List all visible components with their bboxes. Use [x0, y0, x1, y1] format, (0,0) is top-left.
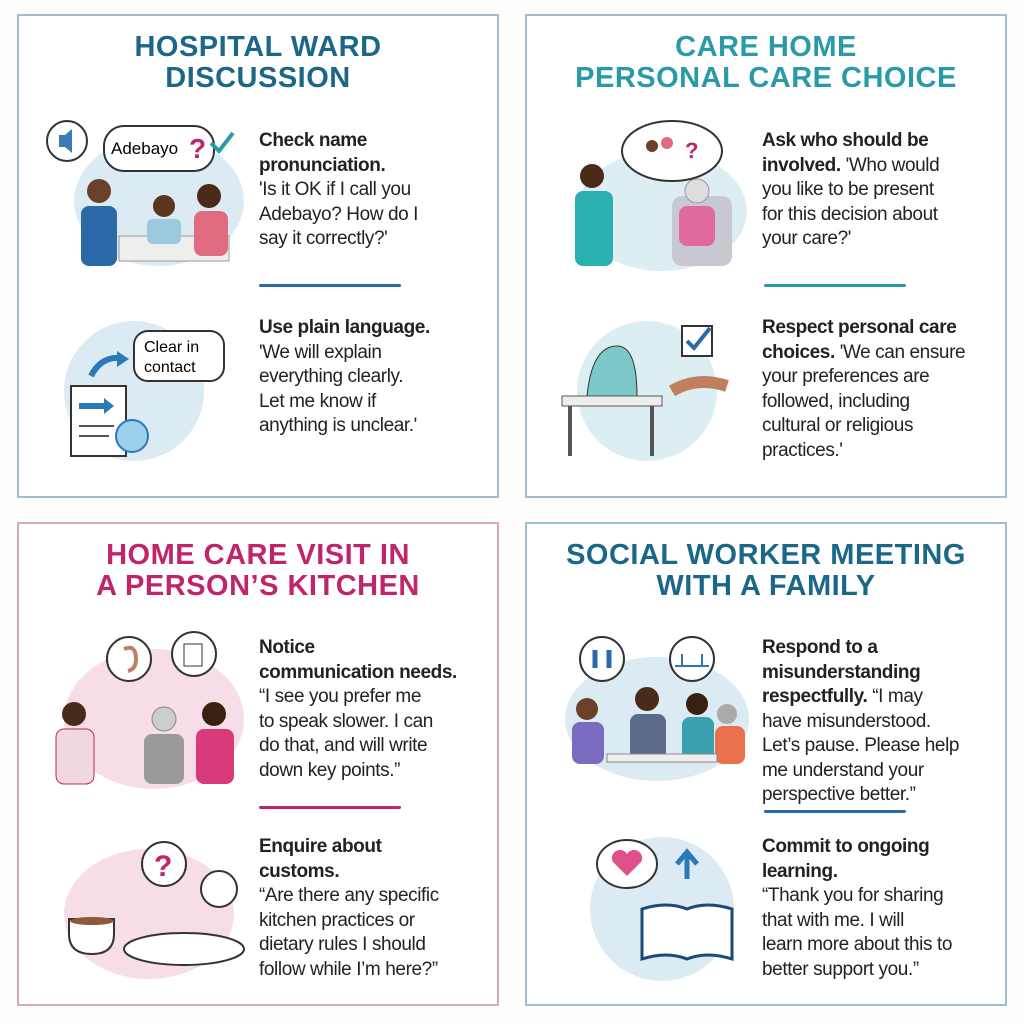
- title: hospital ward: HOSPITAL WARD: [134, 31, 382, 63]
- illustration: plain language: contact: [144, 359, 196, 376]
- text: misunderstanding: me understand your: [762, 760, 924, 780]
- illustration: tea and plate: ?: [154, 850, 172, 883]
- title: care home: CARE HOME: [675, 31, 857, 63]
- text: communication needs: down key points.”: [259, 760, 400, 780]
- text: who involved: Ask who should be: [762, 130, 928, 151]
- text: communication needs: communication needs.: [259, 662, 457, 682]
- title: home care: [96, 539, 420, 602]
- text: plain language: 'We will explain: [259, 342, 382, 362]
- text: plain language: [259, 317, 430, 436]
- illustration: nurse with patient: Adebayo: [111, 139, 178, 158]
- title: home care: A PERSON’S KITCHEN: [96, 570, 420, 602]
- text: pronunciation: say it correctly?': [259, 228, 387, 249]
- illustration: hijab and hand: [562, 321, 729, 461]
- text: misunderstanding: Respond to a: [762, 637, 878, 658]
- text: plain language: anything is unclear.': [259, 415, 417, 436]
- text: communication needs: do that, and will write: [259, 735, 427, 756]
- text: customs: customs.: [259, 860, 339, 882]
- text: personal care choices: followed, including: [762, 390, 910, 412]
- text: pronunciation: Adebayo? How do I: [259, 204, 418, 224]
- text: pronunciation: [259, 130, 418, 249]
- text: ongoing learning: Commit to ongoing: [762, 836, 929, 857]
- panel: hospital ward: [17, 14, 499, 498]
- text: ongoing learning: better support you.”: [762, 958, 919, 980]
- panel: care home: [525, 14, 1007, 498]
- text: plain language: Use plain language.: [259, 317, 430, 338]
- text: misunderstanding: respectfully. “I may: [762, 686, 923, 707]
- text: communication needs: [259, 637, 457, 780]
- text: who involved: for this decision about: [762, 204, 938, 224]
- text: personal care choices: cultural or religious: [762, 415, 913, 436]
- text: customs: dietary rules I should: [259, 934, 426, 955]
- text: personal care choices: choices. 'We can ensure: [762, 342, 965, 362]
- text: plain language: everything clearly.: [259, 366, 403, 387]
- text: ongoing learning: that with me. I will: [762, 910, 904, 930]
- illustration: kitchen visit: [56, 631, 244, 789]
- title: social worker: SOCIAL WORKER MEETING: [566, 539, 966, 571]
- text: personal care choices: [762, 317, 965, 460]
- text: misunderstanding: have misunderstood.: [762, 710, 931, 732]
- illustration: carer and resident: [575, 120, 747, 271]
- title: hospital ward: [134, 31, 382, 94]
- text: misunderstanding: Let’s pause. Please help: [762, 735, 959, 756]
- illustration: tea and plate: [64, 841, 245, 979]
- text: pronunciation: Check name: [259, 130, 367, 151]
- title: care home: [575, 31, 957, 94]
- text: pronunciation: pronunciation.: [259, 154, 385, 176]
- illustration: plain language: Clear in: [144, 339, 199, 356]
- text: who involved: you like to be present: [762, 179, 934, 200]
- text: ongoing learning: learn more about this to: [762, 934, 952, 955]
- text: who involved: involved. 'Who would: [762, 154, 939, 176]
- text: plain language: Let me know if: [259, 390, 376, 412]
- text: communication needs: Notice: [259, 637, 315, 658]
- title: social worker: WITH A FAMILY: [656, 570, 876, 602]
- text: communication needs: to speak slower. I can: [259, 710, 433, 732]
- panel: home care kitchen: [17, 522, 499, 1006]
- text: customs: kitchen practices or: [259, 910, 415, 930]
- text: misunderstanding: misunderstanding: [762, 662, 920, 682]
- text: who involved: [762, 130, 939, 249]
- text: ongoing learning: “Thank you for sharing: [762, 885, 943, 906]
- text: customs: follow while I’m here?”: [259, 958, 438, 980]
- text: customs: “Are there any specific: [259, 885, 439, 906]
- illustration: family meeting: [565, 636, 749, 781]
- illustration: nurse with patient: [46, 120, 244, 266]
- title: care home: PERSONAL CARE CHOICE: [575, 62, 957, 94]
- illustration: nurse with patient: ?: [189, 133, 206, 164]
- illustration: plain language: [64, 321, 225, 461]
- title: hospital ward: DISCUSSION: [165, 62, 351, 94]
- text: customs: Enquire about: [259, 836, 382, 857]
- text: pronunciation: 'Is it OK if I call you: [259, 179, 411, 200]
- text: personal care choices: Respect personal care: [762, 317, 956, 338]
- text: misunderstanding: [762, 637, 959, 805]
- text: customs: [259, 836, 439, 980]
- text: personal care choices: practices.': [762, 440, 843, 460]
- panel: social worker: [525, 522, 1007, 1006]
- title: home care: HOME CARE VISIT IN: [106, 539, 410, 571]
- text: personal care choices: your preferences are: [762, 366, 929, 387]
- illustration: heart and book: [590, 837, 734, 981]
- text: ongoing learning: learning.: [762, 860, 838, 882]
- text: ongoing learning: [762, 836, 952, 980]
- illustration: carer and resident: ?: [685, 138, 698, 163]
- title: social worker: [566, 539, 966, 602]
- text: communication needs: “I see you prefer me: [259, 686, 421, 707]
- text: who involved: your care?': [762, 228, 851, 249]
- text: misunderstanding: perspective better.”: [762, 784, 916, 805]
